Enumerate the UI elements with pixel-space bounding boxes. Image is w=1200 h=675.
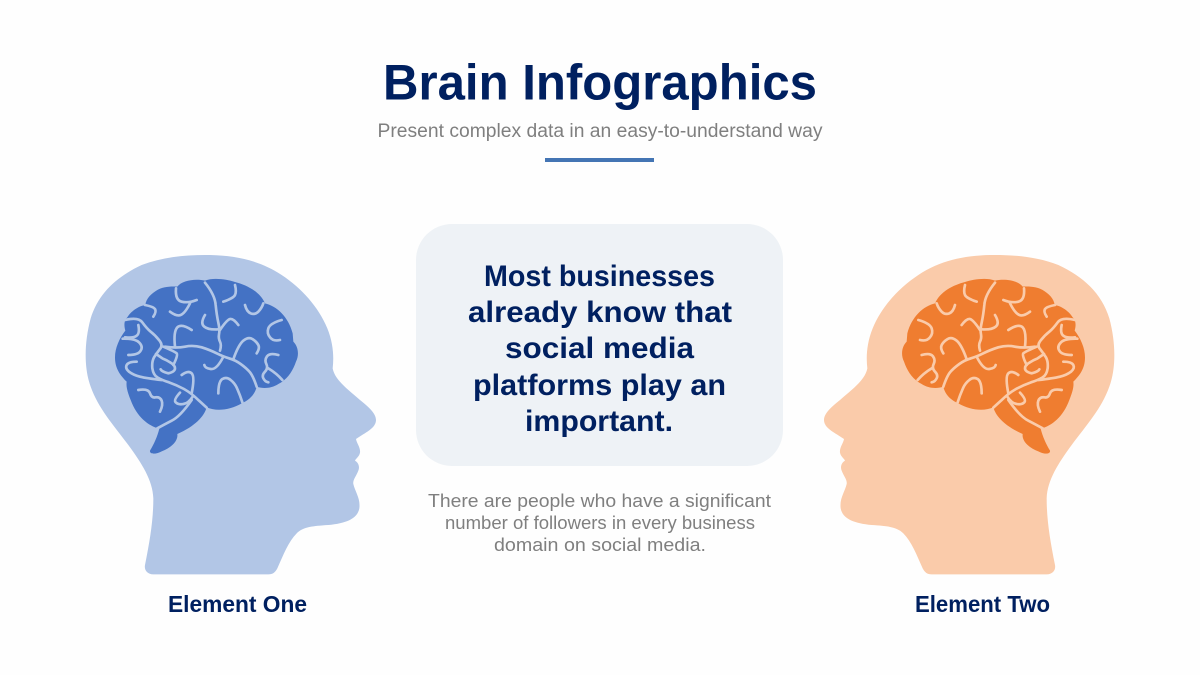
body text: There are people who have a significant [428,490,771,511]
label: element one: Element One [168,591,307,617]
center message text [468,260,732,438]
body text: number of followers in every business [445,512,755,533]
body text [428,490,771,555]
panel: right head with orange brain [824,255,1114,574]
panel: left head with blue brain [86,255,376,574]
label: element two: Element Two [915,591,1050,617]
panel: center message box [416,224,783,466]
center message text: Most businesses [484,260,715,293]
title: Brain Infographics [383,54,817,110]
center message text: platforms play an [473,369,726,402]
subtitle: Present complex data in an easy-to-understand way [378,121,823,142]
brain folds [123,283,282,428]
center message text: social media [505,332,694,365]
title underline accent [545,158,654,162]
center message text: already know that [468,296,732,329]
body text: domain on social media. [494,534,706,555]
brain: blue [115,279,298,454]
center message text: important. [525,405,673,438]
head silhouette: orange [824,255,1114,574]
brain: orange [902,279,1085,454]
brain folds [918,283,1077,428]
head silhouette: blue [86,255,376,574]
